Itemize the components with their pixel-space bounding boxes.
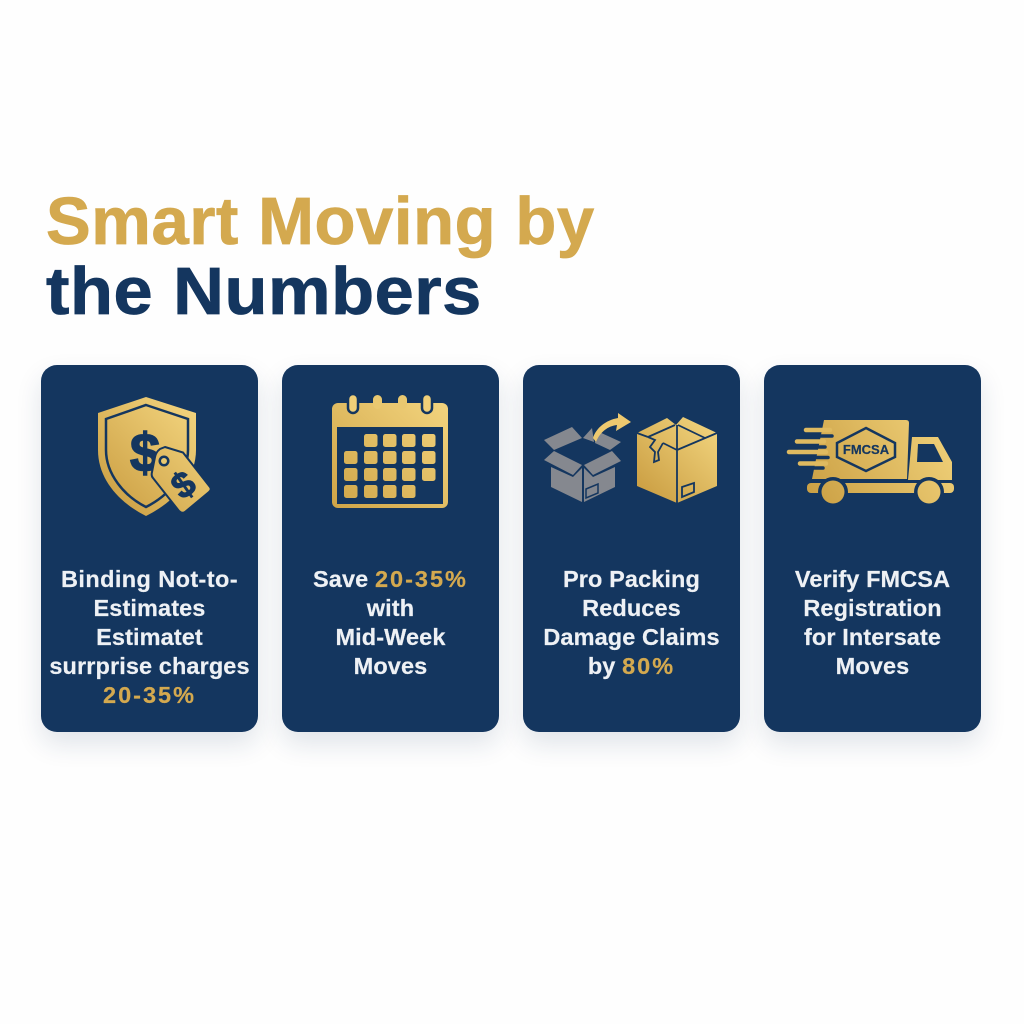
text: verify FMCSA: Verify FMCSA <box>795 566 950 592</box>
icon: moving truck: FMCSA <box>843 442 890 457</box>
text: binding estimates: 20-35% <box>103 682 196 708</box>
icon: shield with price tag <box>98 397 210 516</box>
text: mid-week moves: Mid-Week <box>335 624 446 650</box>
text: mid-week moves <box>313 566 468 679</box>
panel: binding estimates <box>41 365 258 732</box>
icon: shield with price tag: $ <box>130 423 160 483</box>
panel: pro packing <box>523 365 740 732</box>
panel: verify FMCSA <box>764 365 981 732</box>
text: mid-week moves: with <box>367 595 414 621</box>
text: binding estimates: Estimatet <box>96 624 203 650</box>
text: verify FMCSA: Registration <box>803 595 942 621</box>
text: pro packing: Pro Packing <box>563 566 700 592</box>
icon: moving truck <box>786 420 954 504</box>
text: binding estimates <box>49 566 250 708</box>
text: pro packing: Reduces <box>582 595 681 621</box>
title line 1: Smart Moving by <box>46 184 595 259</box>
text: mid-week moves: Moves <box>354 653 427 679</box>
icon: calendar <box>332 395 448 508</box>
text: binding estimates: surrprise charges <box>49 653 250 679</box>
text: pro packing: Damage Claims <box>543 624 720 650</box>
text: pro packing: by 80% <box>588 653 675 679</box>
text: pro packing <box>543 566 720 680</box>
icon: shield with price tag: $ <box>163 462 203 507</box>
title <box>46 184 595 329</box>
panel: mid-week moves <box>282 365 499 732</box>
text: binding estimates: Estimates <box>94 595 205 621</box>
text: verify FMCSA: Moves <box>836 653 909 679</box>
text: mid-week moves: Save 20-35% <box>313 566 468 592</box>
text: verify FMCSA: for Intersate <box>804 624 941 650</box>
text: binding estimates: Binding Not-to- <box>61 566 238 592</box>
title line 2: the Numbers <box>46 254 482 329</box>
text: verify FMCSA <box>794 566 950 679</box>
icon: open box, arrow and damaged box <box>544 413 717 503</box>
